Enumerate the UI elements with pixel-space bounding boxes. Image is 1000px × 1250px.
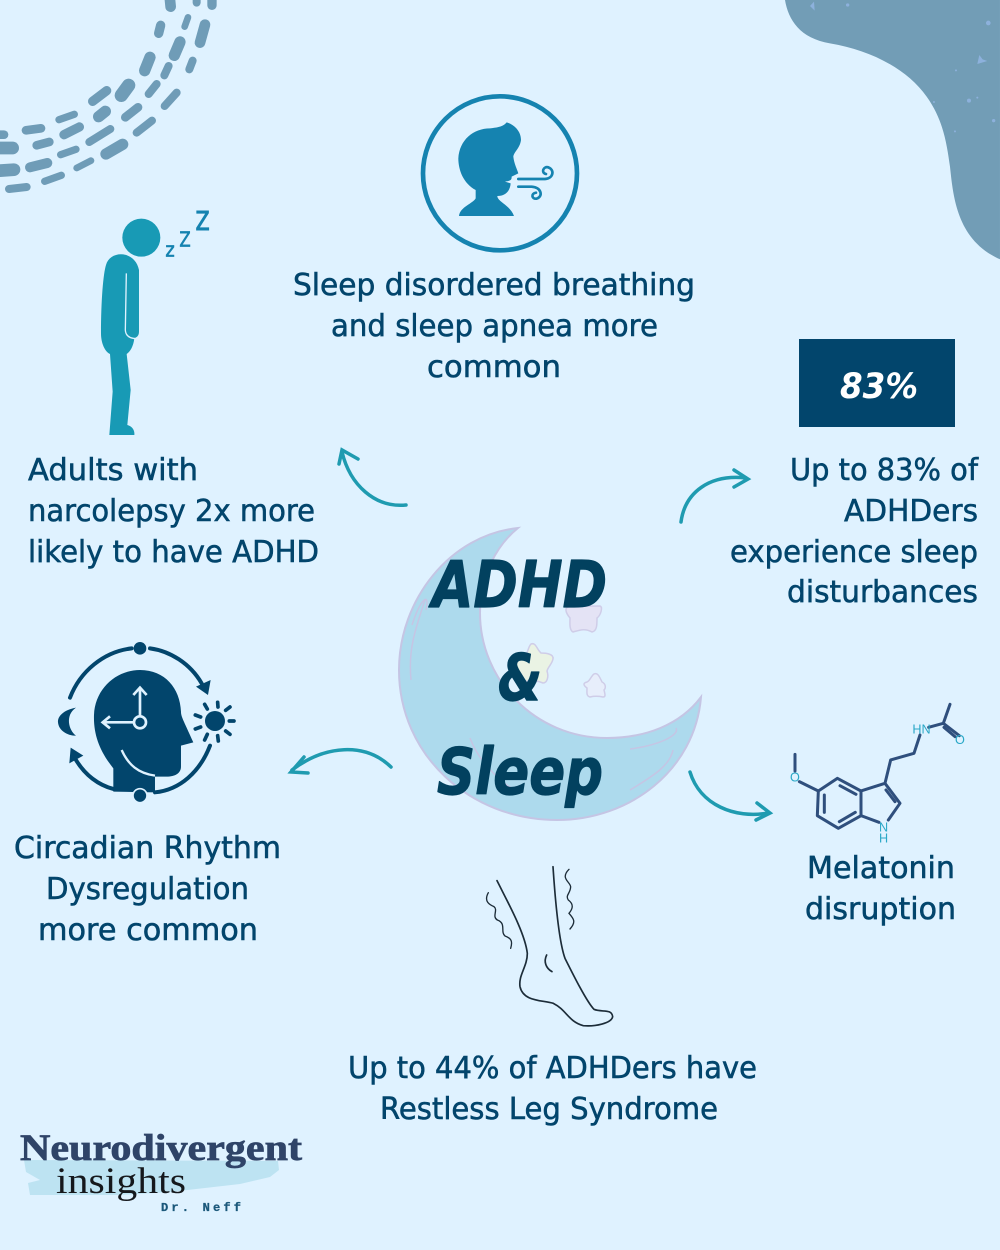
text: circadian rhythm: Circadian Rhythm — [14, 831, 281, 866]
icon: melatonin molecule: N — [879, 821, 888, 835]
icon: sleeping standing person: z — [165, 238, 175, 262]
text: narcolepsy — [28, 453, 319, 570]
text: melatonin: Melatonin — [807, 851, 955, 886]
icon: melatonin molecule: H — [879, 831, 888, 845]
text: sleep disordered breathing: and sleep apnea more — [331, 309, 658, 344]
text: circadian rhythm: Dysregulation — [46, 872, 249, 907]
moon illustration with stars — [399, 528, 701, 820]
text: circadian rhythm — [14, 831, 281, 948]
icon: person exhaling in a circle — [423, 96, 577, 250]
box: 83% — [799, 339, 955, 427]
star: small outline — [584, 674, 605, 697]
text: sleep disturbances — [730, 453, 979, 610]
icon: sleeping standing person: Z — [196, 206, 210, 236]
text: narcolepsy: Adults with — [28, 453, 198, 488]
arrow: to sleep apnea — [339, 450, 406, 505]
text: sleep disturbances: experience sleep — [730, 535, 978, 570]
text: narcolepsy: likely to have ADHD — [28, 535, 319, 570]
icon: restless leg — [487, 867, 613, 1026]
logo: Neurodivergent Insights — [20, 1128, 303, 1215]
text: restless leg syndrome: Up to 44% of ADHDers have — [348, 1051, 757, 1086]
icon: circadian rhythm head — [58, 642, 234, 803]
arrow: to 83% — [681, 470, 748, 522]
text: sleep disordered breathing: Sleep disordered breathing — [293, 268, 695, 303]
text: sleep disturbances: disturbances — [787, 575, 978, 610]
star: cream — [515, 644, 553, 683]
title: & — [498, 642, 542, 716]
text: restless leg syndrome — [348, 1051, 757, 1127]
text: sleep disturbances: Up to 83% of — [790, 453, 979, 488]
icon: sleeping standing person — [101, 206, 210, 435]
text: sleep disordered breathing: common — [427, 350, 561, 385]
logo: Neurodivergent Insights: insights — [56, 1161, 186, 1202]
text: melatonin: disruption — [805, 892, 956, 927]
text: melatonin — [805, 851, 956, 927]
logo: Neurodivergent Insights: Neurodivergent — [20, 1128, 303, 1169]
star: lilac — [566, 606, 601, 632]
icon: melatonin molecule: O — [790, 771, 800, 785]
title: ADHD — [428, 549, 607, 623]
icon: melatonin molecule — [790, 704, 965, 845]
icon: sleeping standing person: Z — [179, 228, 191, 252]
box: 83%: 83% — [840, 367, 918, 407]
icon: melatonin molecule: O — [955, 733, 965, 747]
title: Sleep — [437, 736, 603, 810]
decorative dashed arcs top left — [0, 0, 212, 189]
text: narcolepsy: narcolepsy 2x more — [28, 494, 315, 529]
icon: melatonin molecule: HN — [912, 722, 931, 736]
title — [428, 549, 607, 810]
text: sleep disordered breathing — [293, 268, 695, 385]
logo: Neurodivergent Insights: Dr. Neff — [161, 1201, 241, 1215]
decorative blob top right — [785, 0, 1000, 259]
text: sleep disturbances: ADHDers — [844, 494, 978, 529]
text: circadian rhythm: more common — [38, 913, 258, 948]
text: restless leg syndrome: Restless Leg Syndrome — [380, 1092, 718, 1127]
arrow: to melatonin — [690, 772, 770, 820]
arrow: to circadian rhythm — [291, 750, 391, 773]
